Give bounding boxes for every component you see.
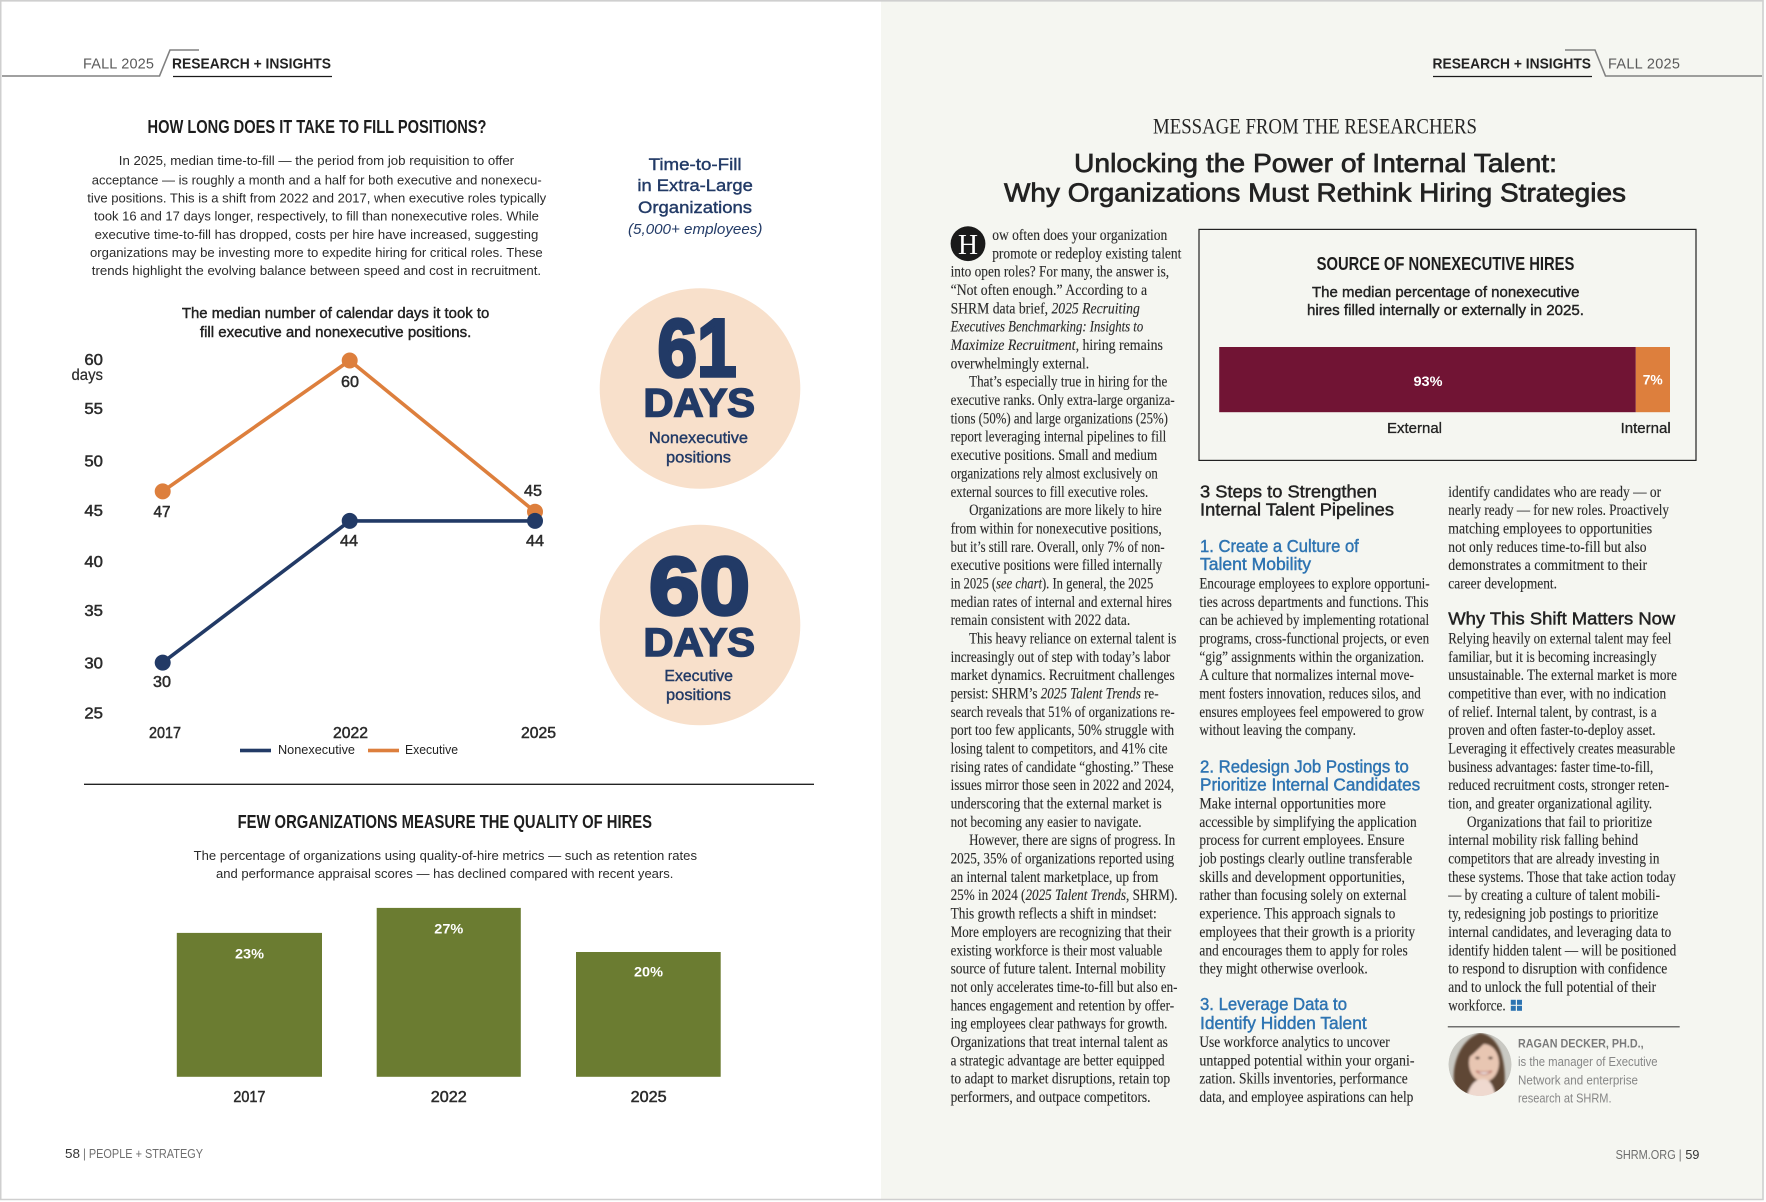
y axis labels: 60 [84, 352, 103, 369]
text block: quality of hire intro [194, 848, 697, 881]
text block: why this shift matters now body: identify hidden talent — will be positioned [1448, 942, 1677, 959]
text block: article column one: median rates of internal and external hires [951, 594, 1172, 611]
text block: article column one: promote or redeploy existing talent [992, 245, 1182, 262]
text block: step 2 body: experience. This approach signals to [1199, 906, 1396, 923]
text block: article column one: 25% in 2024 (2025 Talent Trends, SHRM). [951, 887, 1178, 904]
text block: article column one: market dynamics. Recruitment challenges [951, 667, 1175, 684]
text block: article column one: Executives Benchmarking: Insights to [950, 319, 1143, 336]
text block: step 2 body [1199, 796, 1417, 978]
panel: source of nonexecutive hires: SOURCE OF NONEXECUTIVE HIRES [1317, 254, 1574, 274]
title: unlocking the power of internal talent: Unlocking the Power of Internal Talent: [1074, 148, 1557, 178]
text block: why this shift matters now body [1447, 630, 1677, 1014]
text block: article column one: ing employees clear pathways for growth. [951, 1016, 1167, 1033]
subheading: step 2: Prioritize Internal Candidates [1200, 774, 1420, 794]
text block: why this shift matters now body: internal candidates, and leveraging data to [1448, 924, 1672, 941]
text block: step 1 body [1199, 576, 1430, 739]
text block: article column one: persist: SHRM’s 2025 Talent Trends re- [951, 686, 1159, 702]
text block: article column one: issues mirror those seen in 2022 and 2024, [951, 777, 1174, 794]
panel: right page header [1432, 50, 1762, 76]
text block: article column one: overwhelmingly external. [951, 355, 1089, 372]
bar chart: quality-of-hire metrics: 27% [434, 920, 464, 936]
text block: step 1 body: ment fosters innovation, reduces silos, and [1199, 686, 1421, 702]
text block: step 2 body: rather than focusing solely on external [1199, 887, 1407, 904]
text block: article column one: rising rates of candidate “ghosting.” These [951, 759, 1174, 776]
text block: author bio: Network and enterprise [1518, 1074, 1638, 1088]
y axis labels: 40 [84, 554, 103, 571]
text block: article column one: SHRM data brief, 2025 Recruiting [951, 300, 1140, 317]
text block: step 3 body: Use workforce analytics to uncover [1199, 1034, 1390, 1051]
callout: 60 days executive: DAYS [644, 621, 755, 665]
text block: why this shift matters now body: proven and often faster-to-deploy asset. [1448, 722, 1656, 739]
y axis labels: 55 [84, 401, 103, 418]
text block: article column one: port too few applicants, 50% struggle with [951, 722, 1174, 739]
text block: article column one: Organizations that treat internal talent as [951, 1034, 1168, 1051]
bar chart: quality-of-hire metrics: 23% [235, 946, 265, 962]
text block: step 2 body: process for current employees. Ensure [1199, 832, 1405, 849]
text block: article column one: Maximize Recruitment, hiring remains [950, 337, 1163, 354]
text block: article column one: executive ranks. Only extra-large organiza- [951, 392, 1175, 409]
text block: step 2 body: accessible by simplifying the application [1199, 814, 1417, 831]
series: executive: 47 [154, 504, 170, 521]
footer: left page: 58 [65, 1147, 80, 1161]
text block: article column one: a strategic advantage are better equipped [951, 1052, 1165, 1069]
text block: step 1 body: Encourage employees to explore opportuni- [1199, 576, 1430, 592]
text block: article column one: in 2025 (see chart). In general, the 2025 [951, 576, 1154, 592]
text block: step 1 body: programs, cross-functional projects, or even [1199, 630, 1429, 648]
bar chart: quality-of-hire metrics: 2022 [431, 1089, 467, 1106]
icon: author portrait [1448, 1033, 1512, 1098]
text block: step 2 body: job postings clearly outline transferable [1199, 851, 1412, 868]
stacked bar: external vs internal: Internal [1621, 421, 1671, 437]
heading: how long does it take to fill positions: HOW LONG DOES IT TAKE TO FILL POSITIONS? [148, 117, 486, 137]
text block: article column one: This growth reflects a shift in mindset: [951, 906, 1157, 923]
text block: step 3 continued: career development. [1448, 576, 1557, 592]
text block: article column one: underscoring that the external market is [951, 796, 1162, 812]
text block: why this shift matters now body: workforce. [1448, 997, 1506, 1014]
stacked bar: external vs internal: External [1387, 421, 1442, 437]
text block: why this shift matters now body: these systems. Those that take action today [1448, 869, 1676, 886]
text block: article column one: not becoming any easier to navigate. [951, 814, 1142, 831]
text block: author bio [1518, 1036, 1658, 1106]
series: executive: 60 [341, 374, 359, 391]
y axis labels: 50 [84, 454, 103, 470]
text block: article column one: Organizations are more likely to hire [969, 502, 1162, 519]
y axis labels: 30 [84, 656, 103, 673]
bar chart: quality-of-hire metrics [177, 908, 721, 1106]
chart subtitle [182, 306, 489, 341]
callout: 61 days nonexecutive: 61 [658, 303, 736, 394]
series: nonexecutive: 30 [153, 674, 171, 691]
text block: step 1 body: ensures employees feel empowered to grow [1199, 704, 1424, 721]
x axis labels: 2017 [149, 725, 181, 742]
series: executive: 45 [524, 483, 542, 500]
text block: why this shift matters now body: internal mobility risk falling behind [1448, 832, 1638, 849]
legend: Executive [405, 743, 458, 757]
bar chart: quality-of-hire metrics: 2025 [631, 1089, 667, 1106]
text block: step 1 body: A culture that normalizes internal move- [1199, 667, 1414, 684]
footer: left page: | PEOPLE + STRATEGY [83, 1147, 204, 1161]
panel: time-to-fill heading: in Extra-Large [637, 176, 753, 195]
series: nonexecutive [153, 513, 544, 691]
subheading: step 2: 2. Redesign Job Postings to [1200, 756, 1409, 776]
text block: article column one: executive positions. Small and medium [951, 447, 1157, 464]
chart subtitle: The median number of calendar days it took to [182, 306, 489, 322]
x axis labels: 2025 [521, 725, 556, 742]
drop cap: H [958, 229, 978, 261]
text block: article column one [950, 226, 1182, 1106]
text block: article column one: organizations rely almost exclusively on [951, 465, 1158, 482]
callout: 60 days executive: positions [666, 687, 731, 704]
callout: 61 days nonexecutive: positions [666, 450, 731, 466]
heading: 3 steps to strengthen internal talent pipelines [1200, 481, 1394, 519]
subheading: step 2 [1200, 756, 1420, 794]
text block: why this shift matters now body: familiar, but it is becoming increasingly [1448, 649, 1657, 666]
text block: why this shift matters now body: competitive than ever, with no indication [1448, 686, 1666, 702]
text block: article column one: performers, and outpace competitors. [951, 1089, 1150, 1106]
callout: 61 days nonexecutive [600, 288, 800, 489]
drop cap [951, 226, 985, 261]
text block: article column one: but it’s still rare. Overall, only 7% of non- [951, 539, 1165, 556]
legend: Nonexecutive [278, 743, 355, 757]
heading: 3 steps to strengthen internal talent pipelines: Internal Talent Pipelines [1200, 499, 1394, 519]
text block: article column one: report leveraging internal pipelines to fill [951, 429, 1166, 446]
subheading: step 3 [1200, 994, 1367, 1033]
callout: 61 days nonexecutive: DAYS [644, 382, 755, 426]
title: unlocking the power of internal talent [1004, 148, 1626, 208]
text block: article column one: 2025, 35% of organizations reported using [951, 851, 1174, 868]
text block: article column one: executive positions were filled internally [951, 557, 1163, 574]
text block: article column one: increasingly out of step with today’s labor [951, 649, 1170, 666]
text block: step 3 continued: matching employees to opportunities [1448, 520, 1652, 537]
text block: time-to-fill intro: In 2025, median time-to-fill — the period from job requisition to offer [119, 153, 515, 168]
text block: why this shift matters now body: competitors that are already investing in [1448, 851, 1660, 868]
text block: step 3 body: zation. Skills inventories, performance [1199, 1071, 1408, 1088]
text block: why this shift matters now body: Leveraging it effectively creates measurable [1448, 740, 1675, 758]
text block: why this shift matters now body: tion, and greater organizational agility. [1448, 796, 1652, 812]
panel: source of nonexecutive hires [1199, 229, 1696, 460]
panel: right page header: FALL 2025 [1608, 56, 1680, 72]
text block: article column one: losing talent to competitors, and 41% cite [951, 740, 1168, 758]
panel: left page header: FALL 2025 [83, 56, 154, 72]
y axis labels: 45 [84, 503, 103, 520]
series: nonexecutive: 44 [340, 533, 358, 550]
text block: author bio: is the manager of Executive [1518, 1055, 1658, 1069]
text block: step 3 continued: identify candidates who are ready — or [1448, 484, 1661, 501]
footer: right page: SHRM.ORG | [1616, 1148, 1682, 1162]
stacked bar: external vs internal: 7% [1643, 372, 1663, 388]
text block: why this shift matters now body: of relief. Internal talent, by contrast, is a [1448, 704, 1657, 721]
text block: step 1 body: can be achieved by implementing rotational [1199, 612, 1429, 629]
text block: time-to-fill intro: trends highlight the evolving balance between speed and cost in recruitment. [92, 263, 541, 278]
text block: why this shift matters now body: reduced recruitment costs, stronger reten- [1448, 777, 1669, 794]
text block: step 2 body: and encourages them to apply for roles [1199, 942, 1408, 959]
text block: article column one: However, there are signs of progress. In [969, 832, 1175, 849]
panel: time-to-fill heading: Organizations [638, 198, 752, 217]
x axis labels [149, 725, 556, 742]
panel: left page header: RESEARCH + INSIGHTS [172, 56, 331, 72]
text block: step 3 body: untapped potential within your organi- [1199, 1052, 1414, 1069]
text block: article column one: hances engagement and retention by offer- [951, 997, 1174, 1014]
text block: step 3 continued: nearly ready — for new roles. Proactively [1448, 502, 1669, 519]
text block: article column one: “Not often enough.” According to a [951, 282, 1147, 299]
text block: step 2 body: they might otherwise overlook. [1199, 961, 1368, 978]
text block: article column one: an internal talent marketplace, up from [951, 869, 1158, 886]
bar chart: quality-of-hire metrics: 2017 [233, 1089, 265, 1106]
text block: step 3 continued: not only reduces time-to-fill but also [1448, 539, 1647, 556]
text block: step 1 body: ties across departments and functions. This [1199, 594, 1429, 611]
text block: article column one: More employers are recognizing that their [951, 924, 1171, 941]
stacked bar: external vs internal: 93% [1414, 373, 1443, 389]
text block: time-to-fill intro: tive positions. This is a shift from 2022 and 2017, when executive roles typically [87, 190, 547, 206]
text block: why this shift matters now body: ty, redesigning job postings to prioritize [1448, 906, 1658, 923]
text block: why this shift matters now body: Organizations that fail to prioritize [1467, 814, 1652, 831]
text block: step 2 body: employees that their growth is a priority [1199, 924, 1415, 941]
text block: author bio: research at SHRM. [1518, 1092, 1612, 1106]
y axis labels: days [72, 367, 103, 384]
callout: 61 days nonexecutive: Nonexecutive [649, 430, 748, 447]
text block: step 3 continued: demonstrates a commitment to their [1448, 557, 1647, 574]
text block: quality of hire intro: The percentage of organizations using quality-of-hire metrics — such as retention rates [194, 848, 697, 863]
callout: 60 days executive: 60 [649, 541, 750, 632]
text block: article column one: to adapt to market disruptions, retain top [951, 1071, 1171, 1088]
text block: step 3 body: data, and employee aspirations can help [1199, 1089, 1414, 1106]
y axis labels: 25 [84, 706, 103, 722]
callout: 60 days executive: Executive [664, 668, 733, 685]
series: nonexecutive: 44 [526, 533, 544, 550]
text block: step 1 body: without leaving the company. [1199, 722, 1356, 739]
line chart: median days to fill [72, 352, 556, 757]
text block: time-to-fill intro: took 16 and 17 days longer, respectively, to fill than nonexecutive roles. While [94, 208, 539, 224]
x axis labels: 2022 [333, 725, 368, 742]
text block: quality of hire intro: and performance appraisal scores — has declined compared with recent years. [216, 866, 673, 881]
y axis labels [72, 352, 103, 722]
heading: few organizations measure quality of hires: FEW ORGANIZATIONS MEASURE THE QUALITY OF HIRES [238, 812, 652, 832]
subheading: step 3: 3. Leverage Data to [1200, 994, 1347, 1014]
subheading: step 1: Talent Mobility [1200, 554, 1311, 574]
panel: source of nonexecutive hires: hires filled internally or externally in 2025. [1307, 303, 1584, 319]
text block: article column one: source of future talent. Internal mobility [951, 961, 1166, 978]
subheading: step 3: Identify Hidden Talent [1200, 1013, 1367, 1033]
stacked bar: external vs internal [1219, 347, 1671, 437]
text block: step 3 continued [1448, 484, 1669, 592]
text block: step 1 body: “gig” assignments within the organization. [1199, 649, 1424, 666]
subheading: step 1 [1200, 536, 1359, 574]
series: executive [154, 352, 543, 521]
text block: why this shift matters now body: to respond to disruption with confidence [1448, 961, 1667, 978]
text block: time-to-fill intro: acceptance — is roughly a month and a half for both executive and nonexecu- [92, 172, 542, 187]
heading: why this shift matters now: Why This Shift Matters Now [1448, 609, 1676, 629]
text block: article column one: remain consistent with 2022 data. [951, 612, 1130, 629]
text block: article column one: external sources to fill executive roles. [951, 484, 1148, 501]
footer: right page: 59 [1685, 1148, 1699, 1162]
text block: article column one: from within for nonexecutive positions, [951, 520, 1162, 537]
text block: article column one: into open roles? For many, the answer is, [951, 264, 1169, 281]
icon: end mark [1511, 1000, 1522, 1011]
heading: 3 steps to strengthen internal talent pipelines: 3 Steps to Strengthen [1200, 481, 1377, 501]
callout: 60 days executive [600, 525, 800, 725]
panel: source of nonexecutive hires: The median percentage of nonexecutive [1312, 285, 1580, 301]
text block: author bio: RAGAN DECKER, PH.D., [1518, 1036, 1644, 1050]
kicker: message from the researchers: MESSAGE FROM THE RESEARCHERS [1153, 114, 1477, 139]
chart subtitle: fill executive and nonexecutive positions. [200, 325, 471, 341]
text block: step 2 body: skills and development opportunities, [1199, 869, 1405, 886]
text block: article column one: not only accelerates time-to-fill but also en- [951, 979, 1178, 996]
text block: article column one: ow often does your organization [992, 227, 1168, 244]
text block: time-to-fill intro [87, 153, 547, 278]
text block: why this shift matters now body: and to unlock the full potential of their [1448, 979, 1656, 996]
legend [240, 743, 458, 757]
text block: why this shift matters now body: Relying heavily on external talent may feel [1448, 630, 1671, 648]
text block: article column one: tions (50%) and large organizations (25%) [951, 410, 1168, 427]
panel: left page header [2, 50, 332, 76]
text block: article column one: That’s especially true in hiring for the [969, 374, 1167, 391]
text block: article column one: search reveals that 51% of organizations re- [951, 704, 1175, 721]
text block: article column one: This heavy reliance on external talent is [969, 630, 1176, 648]
panel: right page header: RESEARCH + INSIGHTS [1432, 56, 1591, 72]
text block: why this shift matters now body: unsustainable. The external market is more [1448, 667, 1677, 684]
y axis labels: 35 [84, 603, 103, 620]
text block: article column one: existing workforce is their most valuable [951, 942, 1162, 959]
panel: time-to-fill heading: (5,000+ employees) [628, 222, 762, 238]
text block: why this shift matters now body: — by creating a culture of talent mobili- [1447, 887, 1660, 904]
title: unlocking the power of internal talent: Why Organizations Must Rethink Hiring Strategies [1004, 178, 1626, 208]
text block: why this shift matters now body: business advantages: faster time-to-fill, [1448, 759, 1653, 776]
text block: time-to-fill intro: executive time-to-fill has dropped, costs per hire have increased, suggesting [95, 227, 538, 242]
panel: time-to-fill heading: Time-to-Fill [649, 155, 742, 174]
text block: time-to-fill intro: organizations may be investing more to expedite hiring for critical roles. These [90, 245, 543, 260]
text block: step 2 body: Make internal opportunities more [1199, 796, 1386, 812]
text block: step 3 body [1199, 1034, 1414, 1106]
bar chart: quality-of-hire metrics: 20% [634, 964, 664, 980]
panel: time-to-fill heading [628, 155, 762, 238]
subheading: step 1: 1. Create a Culture of [1200, 536, 1359, 556]
